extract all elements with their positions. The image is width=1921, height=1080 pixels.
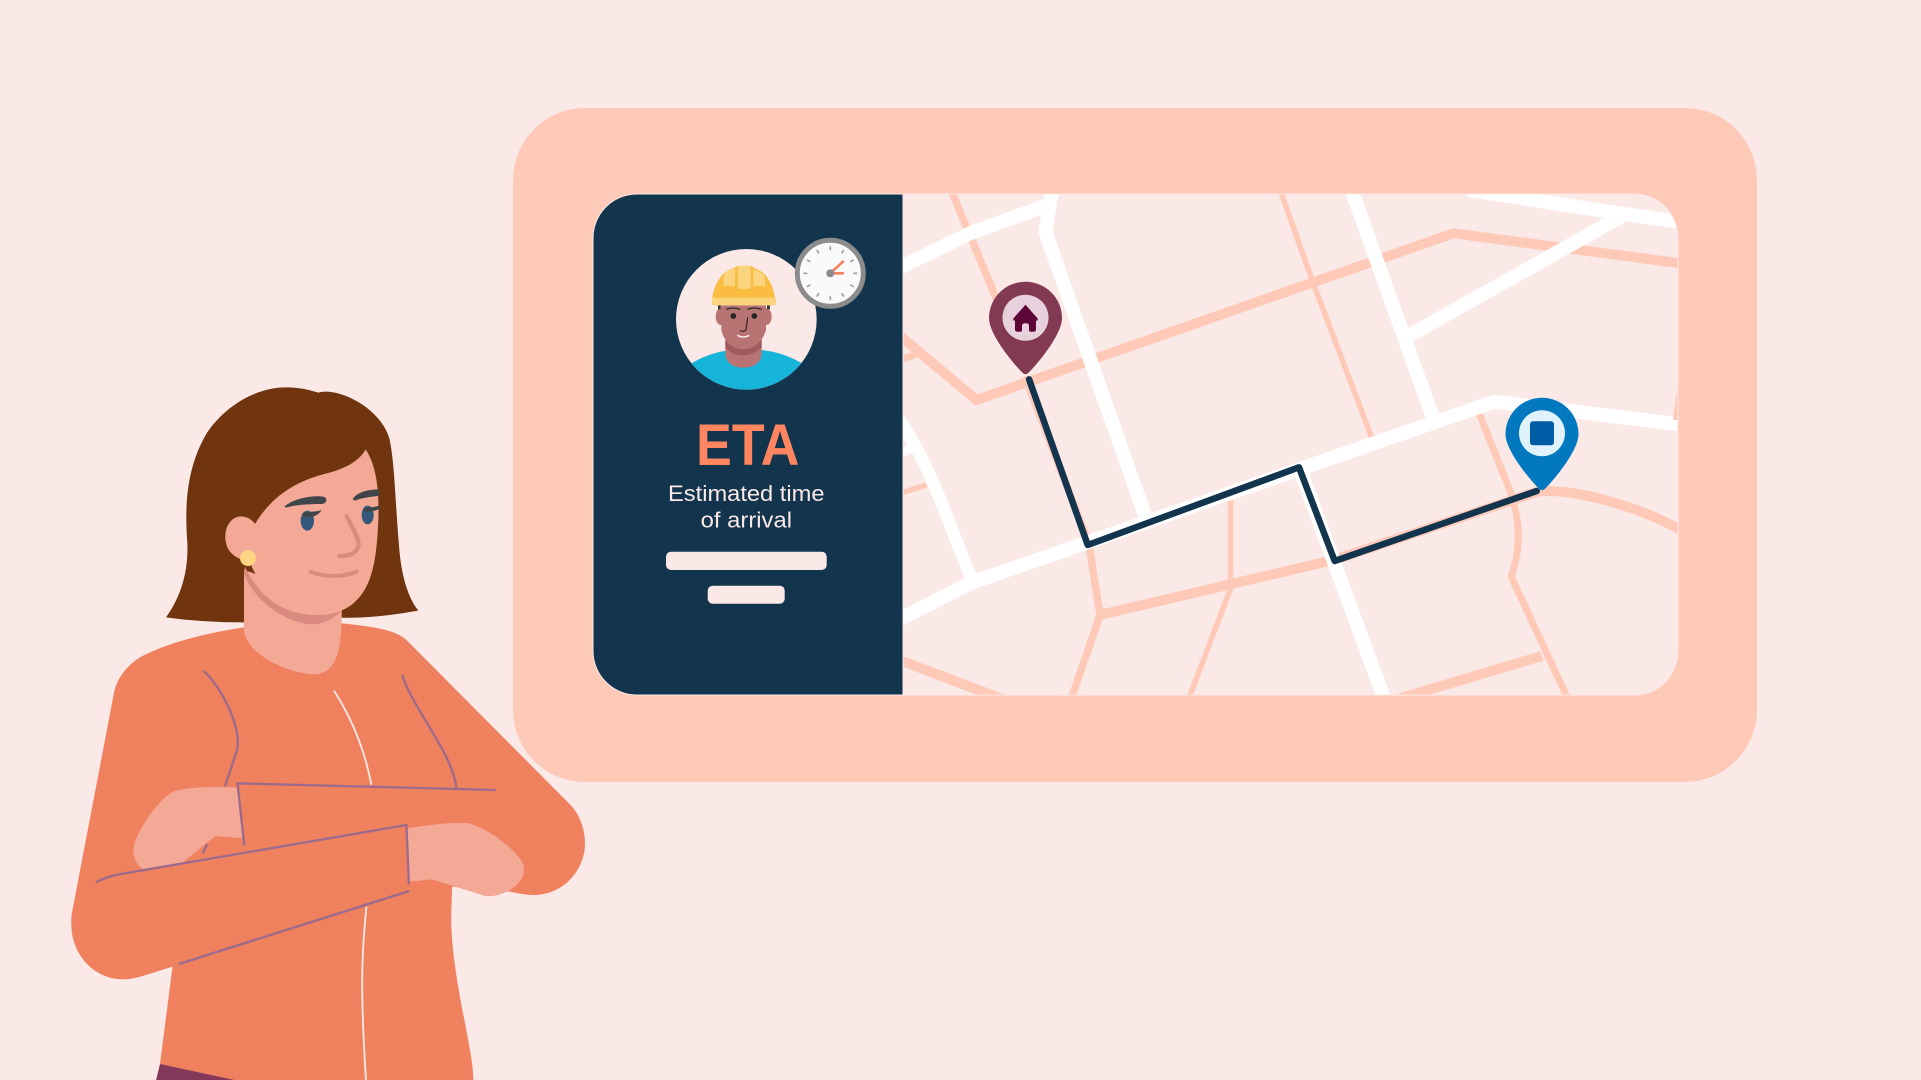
arms, hands and shirt lines xyxy=(96,671,524,1080)
icon: clock xyxy=(797,240,863,306)
placeholder bar: long xyxy=(666,552,827,570)
map outline xyxy=(903,194,1678,695)
icon: home pin xyxy=(989,282,1062,374)
hair xyxy=(166,387,418,622)
panel: device frame xyxy=(513,108,1757,782)
head and neck xyxy=(225,449,380,674)
text block: subtitle xyxy=(668,481,824,532)
placeholder bar: short xyxy=(708,586,785,604)
icon: worker avatar xyxy=(673,249,820,397)
text block: subtitle: Estimated time xyxy=(668,481,824,506)
heading: ETA: ETA xyxy=(696,413,800,478)
torso and arm xyxy=(71,623,585,1080)
route line xyxy=(1029,379,1537,561)
text block: subtitle: of arrival xyxy=(701,507,792,532)
panel: ETA card xyxy=(593,194,903,695)
panel: route map xyxy=(895,190,1686,700)
icon: destination pin xyxy=(1506,398,1578,490)
illustration: woman xyxy=(71,387,585,1080)
